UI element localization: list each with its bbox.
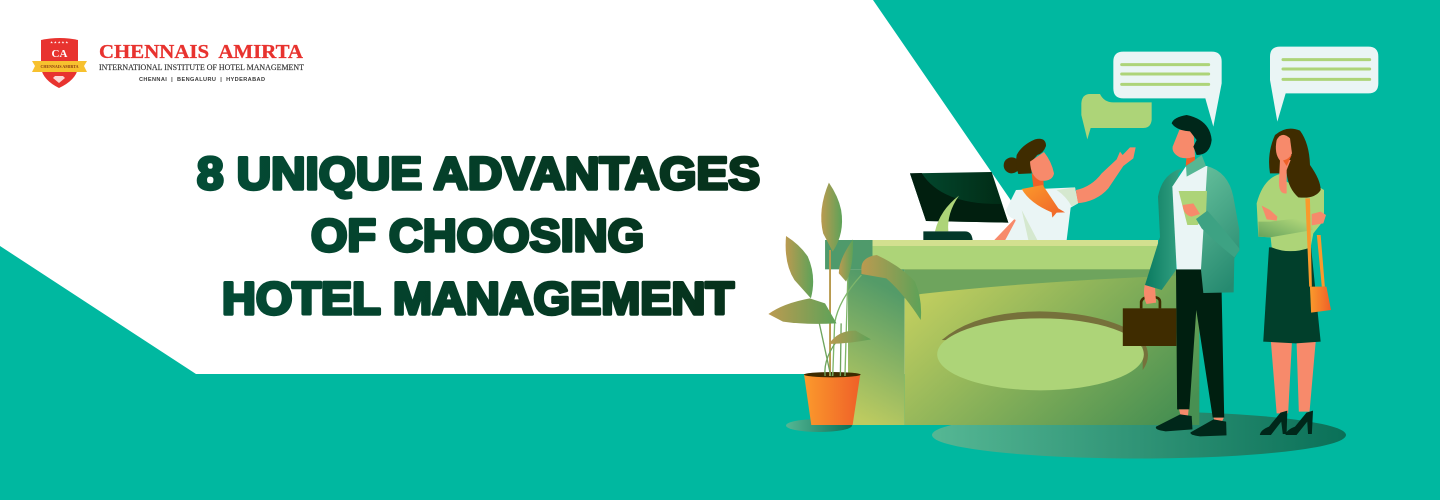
speech bubble: man: [1113, 52, 1222, 127]
scarf: [1022, 185, 1065, 218]
leaves: [768, 183, 921, 344]
man collar: [1186, 155, 1206, 177]
logo name: CHENNAIS AMIRTA: [99, 41, 304, 63]
man tablet: [1179, 191, 1207, 225]
man shirt: [1172, 166, 1207, 269]
monitor: [910, 172, 1008, 240]
title: HOTEL MANAGEMENT: [222, 273, 734, 324]
plant: [768, 183, 921, 376]
man neck: [1186, 155, 1195, 166]
man legs and shoes: [1156, 269, 1227, 436]
neck: [1032, 173, 1044, 192]
woman sweater: [1257, 174, 1324, 251]
raised arm and hand: [1076, 147, 1136, 203]
man hand and briefcase: [1123, 285, 1176, 346]
woman bag: [1305, 198, 1331, 313]
man sleeve cuff: [1196, 211, 1239, 257]
speech bubble: receptionist: [1081, 94, 1152, 139]
logo: [32, 38, 304, 88]
receptionist: [994, 139, 1136, 240]
woman neck shadow: [1282, 155, 1292, 166]
face: [1030, 152, 1054, 181]
man jacket: [1145, 115, 1239, 293]
woman lower body: [1260, 247, 1321, 435]
title: 8 UNIQUE ADVANTAGES: [197, 148, 760, 199]
title: OF CHOOSING: [311, 210, 644, 261]
logo shield: ★★★★★: [50, 40, 69, 44]
title: [197, 148, 760, 324]
logo cities: CHENNAI | BENGALURU | HYDERABAD: [139, 77, 265, 83]
desk shaded band: [905, 269, 1181, 298]
desk upper band: [873, 246, 1158, 270]
desk left block: [825, 240, 873, 269]
back arm: [994, 218, 1017, 240]
desk side: [848, 269, 905, 425]
woman hair: [1269, 129, 1321, 198]
woman forearm: [1258, 217, 1313, 237]
logo shield: [32, 38, 87, 88]
man hair: [1172, 115, 1212, 155]
woman hands: [1262, 206, 1326, 225]
floor shadow under people: [932, 412, 1346, 458]
man face: [1173, 128, 1195, 158]
logo subtitle: INTERNATIONAL INSTITUTE OF HOTEL MANAGEMENT: [99, 63, 304, 72]
white background panel: [0, 0, 1045, 374]
blouse fold: [1022, 187, 1078, 240]
woman neck: [1279, 160, 1291, 193]
man: [1123, 115, 1239, 436]
woman upper body: [1257, 129, 1326, 251]
woman: [1257, 129, 1331, 435]
hair: [1004, 139, 1046, 174]
pot: [804, 372, 861, 425]
desk oval: [937, 318, 1144, 390]
logo shield: CHENNAIS AMIRTA: [40, 64, 79, 69]
man hand: [1183, 203, 1200, 217]
speech bubble: woman: [1270, 47, 1378, 122]
desk oval shadow: [942, 311, 1148, 370]
pot shadow: [786, 419, 852, 432]
stems: [819, 250, 861, 376]
desk front: [905, 269, 1199, 425]
reception desk: [825, 240, 1199, 425]
blouse: [1005, 187, 1078, 240]
woman face: [1276, 135, 1292, 161]
logo shield: CA: [52, 48, 67, 60]
desk top: [873, 240, 1158, 246]
